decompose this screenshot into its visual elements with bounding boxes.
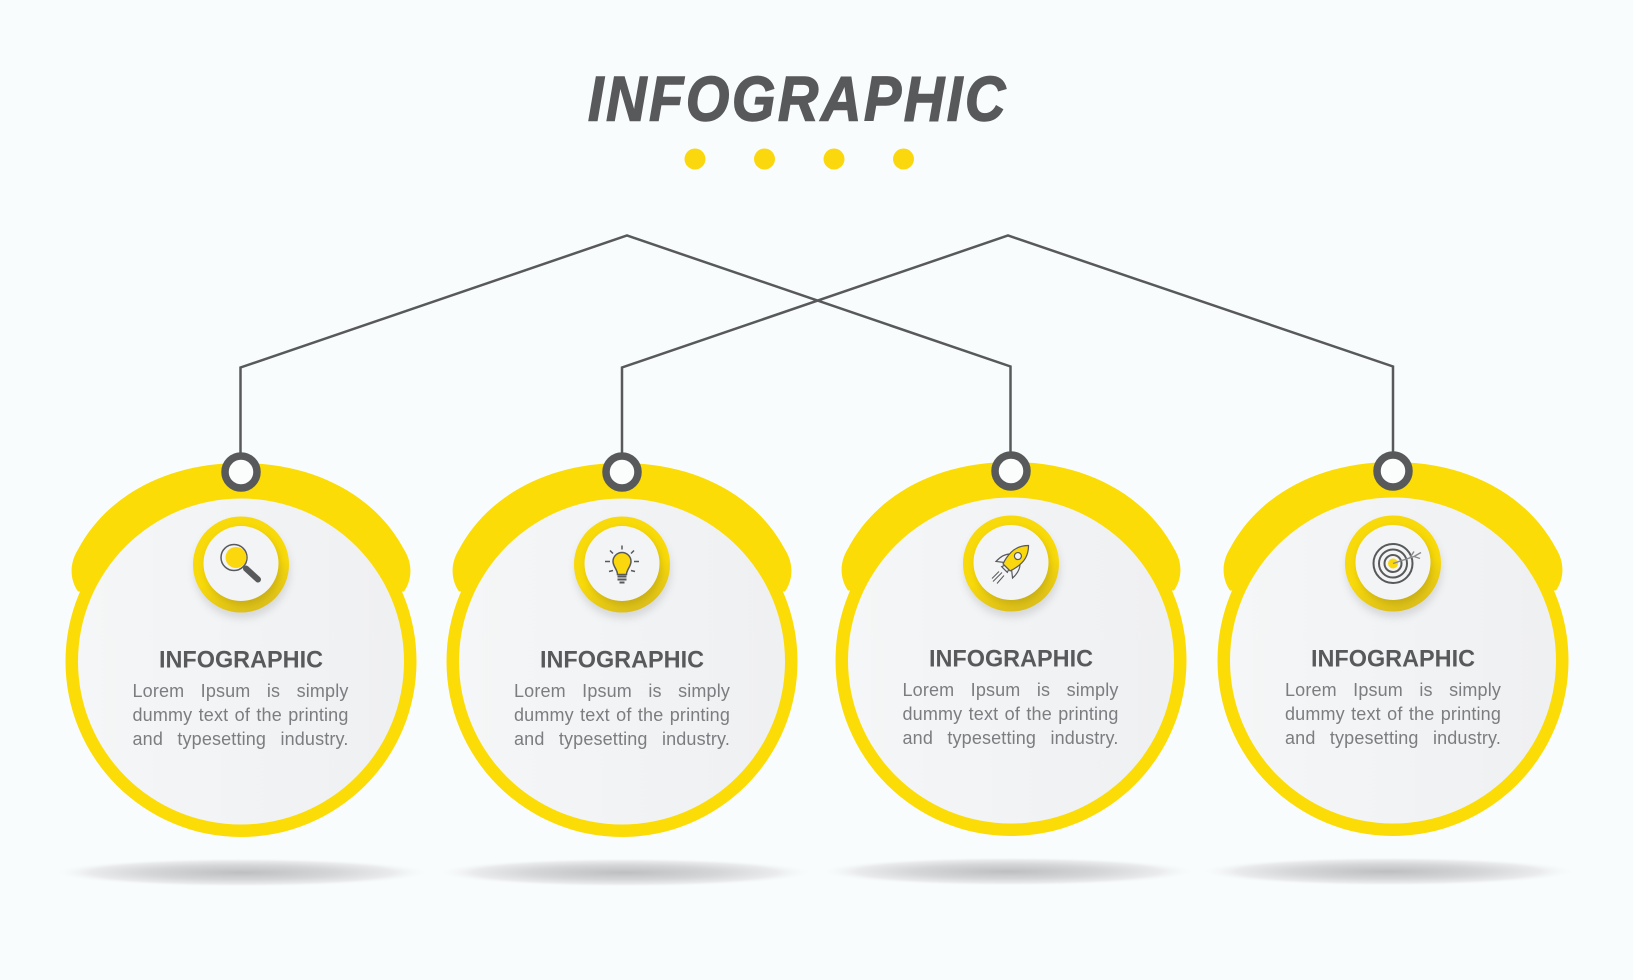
yellow cap (1224, 462, 1562, 590)
inner face (459, 498, 785, 824)
description: dummy text of the printing (902, 704, 1118, 724)
yellow cap (841, 462, 1180, 590)
icon badge: rocket (962, 515, 1060, 617)
yellow outer ring (835, 484, 1186, 836)
description: and typesetting industry. (514, 729, 730, 749)
description (514, 681, 730, 749)
hanging ring (224, 456, 256, 488)
hanging ring (994, 454, 1026, 486)
description (1285, 680, 1501, 748)
connector: cards 1 and 3 (240, 236, 1010, 455)
description: and typesetting industry. (132, 729, 348, 749)
inner face (1230, 497, 1556, 823)
panel: card 1 magnifier (66, 452, 416, 885)
description: and typesetting industry. (1285, 728, 1501, 748)
description: Lorem Ipsum is simply (1285, 680, 1501, 700)
description: and typesetting industry. (902, 728, 1118, 748)
shadow (435, 858, 815, 887)
description: dummy text of the printing (514, 705, 730, 725)
shadow (818, 856, 1198, 886)
page header: title and dots (588, 64, 1008, 170)
heading: INFOGRAPHIC (1311, 645, 1475, 672)
icon badge: magnifier (192, 516, 290, 618)
panel: card 2 lightbulb (446, 452, 798, 885)
hanging ring (606, 456, 638, 488)
panel: card 4 target (1218, 451, 1568, 884)
description: Lorem Ipsum is simply (514, 681, 730, 701)
yellow cap (453, 463, 791, 592)
shadow (1198, 856, 1578, 886)
title: INFOGRAPHIC (588, 64, 1008, 134)
inner face (78, 498, 404, 824)
hanging ring (1377, 454, 1409, 486)
description: Lorem Ipsum is simply (132, 681, 348, 701)
heading: INFOGRAPHIC (158, 646, 322, 674)
connector: cards 2 and 4 (622, 236, 1393, 455)
yellow outer ring (1218, 484, 1568, 836)
description (132, 681, 348, 749)
description: Lorem Ipsum is simply (902, 680, 1118, 700)
connector lines (239, 234, 1394, 452)
description (902, 680, 1118, 748)
description: dummy text of the printing (132, 705, 348, 725)
inner face (848, 497, 1174, 823)
icon badge: target (1345, 515, 1442, 617)
four yellow dots (684, 148, 914, 170)
heading: INFOGRAPHIC (540, 646, 704, 674)
yellow cap (71, 463, 410, 592)
description: dummy text of the printing (1285, 704, 1501, 724)
panel: card 3 rocket (836, 451, 1186, 884)
icon badge: lightbulb (574, 516, 671, 618)
shadow (51, 858, 431, 887)
heading: INFOGRAPHIC (928, 645, 1092, 672)
yellow outer ring (446, 486, 798, 837)
yellow outer ring (65, 486, 416, 837)
